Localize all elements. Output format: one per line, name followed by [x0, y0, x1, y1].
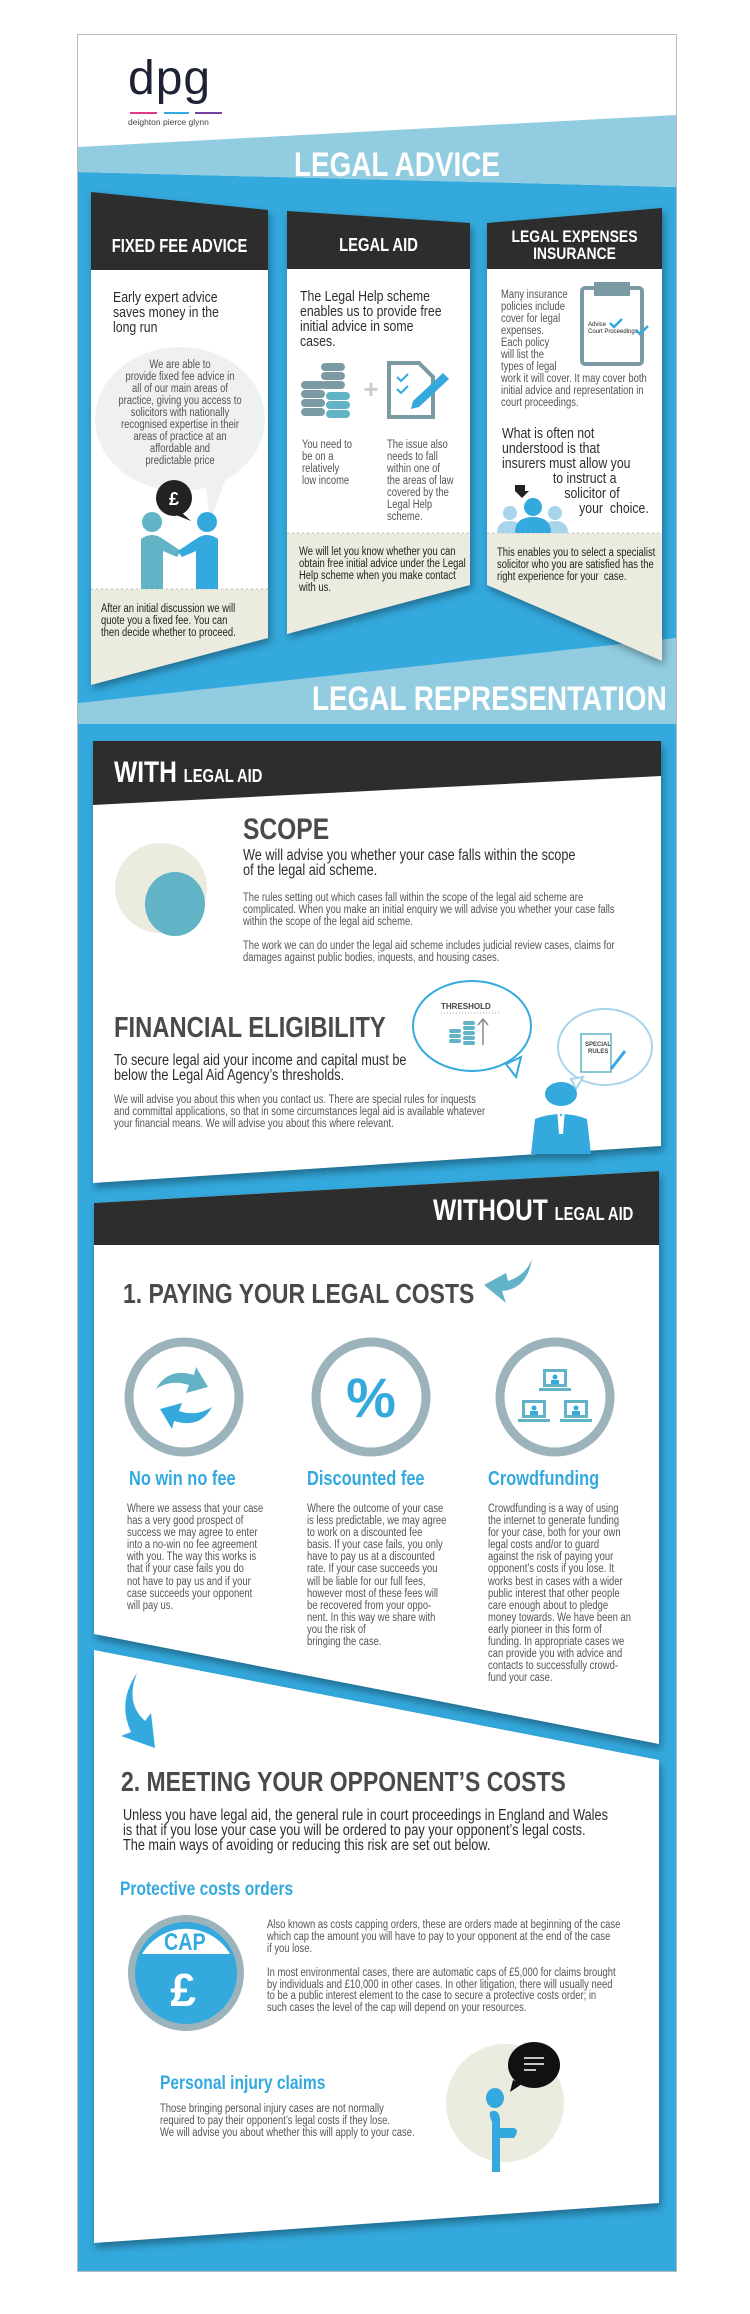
icon: overlapping circles — [115, 843, 207, 936]
choice text: to instruct a — [553, 470, 616, 487]
icon: threshold bubble and person: THRESHOLD — [441, 1002, 491, 1011]
footer text: right experience for your case. — [497, 571, 626, 583]
text: area of law: needs to fall — [387, 451, 438, 463]
discounted fee text: to work on a discounted fee — [307, 1527, 422, 1539]
arrow down — [121, 1673, 155, 1748]
discounted fee text: be recovered from your oppo- — [307, 1600, 431, 1612]
scope body — [243, 892, 615, 964]
intro text: initial advice in some — [300, 318, 413, 335]
financial lead — [114, 1052, 406, 1084]
crowdfunding text: Crowdfunding is a way of using — [488, 1503, 619, 1515]
choice text: understood is that — [502, 440, 600, 457]
intro text — [113, 289, 219, 336]
discounted fee text: Where the outcome of your case — [307, 1503, 443, 1515]
footer text: with us. — [299, 582, 331, 594]
speech bubble: areas of practice at an — [133, 431, 227, 443]
logo: dpg: deighton pierce glynn — [128, 117, 209, 127]
arrow — [484, 1259, 532, 1303]
speech bubble: provide fixed fee advice in — [125, 371, 235, 383]
choice text: solicitor of — [564, 485, 620, 502]
footer text: quote you a fixed fee. You can — [101, 615, 227, 627]
scope lead: of the legal aid scheme. — [243, 862, 377, 879]
crowdfunding text: care enough about to pledge — [488, 1600, 608, 1612]
intro text: The main ways of avoiding or reducing this risk are set out below. — [123, 1837, 490, 1854]
insurance text: Many insurance — [501, 289, 568, 301]
crowdfunding text: legal costs and/or to guard — [488, 1539, 599, 1551]
speech bubble: predictable price — [145, 455, 215, 467]
icon: clipboard — [580, 282, 649, 366]
heading: meeting your opponent's costs: 2. MEETING YOUR OPPONENT’S COSTS — [121, 1766, 566, 1797]
insurance text: policies include — [501, 301, 565, 313]
icon: crowdfunding computers — [496, 1338, 614, 1456]
financial body: We will advise you about this when you contact us. There are special rules for inquests — [114, 1094, 476, 1106]
insurance text: work it will cover. It may cover both — [501, 373, 647, 385]
financial body: your financial means. We will advise you about this where relevant. — [114, 1118, 394, 1130]
intro text: Early expert advice — [113, 289, 218, 306]
intro text — [300, 288, 442, 350]
text: income requirement: relatively — [302, 463, 339, 475]
financial lead: below the Legal Aid Agency’s thresholds. — [114, 1067, 344, 1084]
panel: fixed fee advice — [88, 192, 275, 692]
discounted fee text: you the risk of — [307, 1624, 366, 1636]
choice text: your choice. — [579, 500, 649, 517]
scope body: The rules setting out which cases fall within the scope of the legal aid scheme are — [243, 892, 583, 904]
discounted fee title: Discounted fee — [307, 1468, 425, 1490]
crowdfunding text: public interest that other people — [488, 1588, 620, 1600]
text: area of law: within one of — [387, 463, 440, 475]
header text: LEGAL EXPENSES — [511, 227, 638, 246]
insurance text: initial advice and representation in — [501, 385, 644, 397]
protective costs orders title: Protective costs orders — [120, 1879, 293, 1900]
panel: without legal aid part 2 — [91, 1650, 666, 2252]
speech bubble: We are able to — [149, 359, 211, 371]
discounted fee text: basis. If your case fails, you only — [307, 1539, 443, 1551]
no win no fee text: that if your case fails you do — [127, 1563, 244, 1575]
protective costs text: In most environmental cases, there are automatic caps of £5,000 for claims brought — [267, 1967, 616, 1979]
text: area of law — [387, 439, 454, 523]
no win no fee text: success we may agree to enter — [127, 1527, 258, 1539]
no win no fee text: Where we assess that your case — [127, 1503, 263, 1515]
heading: legal advice: LEGAL ADVICE — [294, 146, 500, 184]
speech bubble: recognised expertise in their — [121, 419, 239, 431]
no win no fee text: into a no-win no fee agreement — [127, 1539, 257, 1551]
scope body: within the scope of the legal aid scheme. — [243, 916, 413, 928]
footer text: then decide whether to proceed. — [101, 627, 236, 639]
footer text: solicitor who you are satisfied has the — [497, 559, 654, 571]
personal injury text: Those bringing personal injury cases are not normally — [160, 2103, 384, 2115]
scope heading: SCOPE — [243, 813, 329, 846]
icon: no win no fee — [124, 1338, 244, 1456]
logo: dpg: dpg — [128, 52, 211, 105]
footer text: This enables you to select a specialist — [497, 547, 655, 559]
insurance text: cover for legal — [501, 313, 560, 325]
protective costs text: which cap the amount you will have to pay to your opponent at the end of the case — [267, 1931, 610, 1943]
background frame — [77, 34, 677, 2272]
crowdfunding text: opponent’s costs if you lose. It — [488, 1563, 614, 1575]
icon: clipboard: Court Proceedings — [588, 329, 638, 335]
intro text: long run — [113, 319, 157, 336]
header text: LEGAL AID — [339, 235, 418, 255]
insurance text: types of legal — [501, 361, 557, 373]
icon: cap: £ — [170, 1964, 196, 2016]
panel: without legal aid part 1 — [91, 1171, 666, 1752]
panel: with legal aid — [90, 741, 668, 1192]
text: income requirement: low income — [302, 475, 349, 487]
icon: people with selection — [497, 485, 568, 533]
crowdfunding title: Crowdfunding — [488, 1468, 599, 1490]
financial body: and committal applications, so that in some circumstances legal aid is available whatever — [114, 1106, 485, 1118]
no win no fee title: No win no fee — [129, 1468, 236, 1490]
icon: person talking — [446, 2042, 566, 2172]
personal injury text — [160, 2103, 415, 2139]
scope body: The work we can do under the legal aid scheme includes judicial review cases, claims for — [243, 940, 615, 952]
financial eligibility heading: FINANCIAL ELIGIBILITY — [114, 1012, 386, 1044]
icon: threshold bubble and person: RULES — [588, 1049, 608, 1055]
scope lead: We will advise you whether your case falls within the scope — [243, 847, 576, 864]
crowdfunding text: against the risk of paying your — [488, 1551, 613, 1563]
discounted fee text — [307, 1503, 446, 1648]
personal injury text: required to pay their opponent’s legal costs if they lose. — [160, 2115, 390, 2127]
header text: INSURANCE — [533, 244, 616, 263]
protective costs text — [267, 1920, 620, 2015]
discounted fee text: have to pay us at a discounted — [307, 1551, 435, 1563]
text: area of law: The issue also — [387, 439, 448, 451]
text: area of law: scheme. — [387, 511, 423, 523]
choice text: insurers must allow you — [502, 455, 631, 472]
no win no fee text — [127, 1503, 263, 1612]
intro text: is that if you lose your case you will be ordered to pay your opponent’s legal costs. — [123, 1822, 586, 1839]
footer text — [497, 547, 656, 583]
speech bubble: practice, giving you access to — [118, 395, 242, 407]
insurance text: expenses. — [501, 325, 544, 337]
financial body — [114, 1094, 485, 1130]
crowdfunding text: fund your case. — [488, 1672, 552, 1684]
footer text — [101, 603, 236, 639]
no win no fee text: case succeeds your opponent — [127, 1588, 252, 1600]
no win no fee text: will pay us. — [127, 1600, 173, 1612]
insurance text: will list the — [501, 349, 544, 361]
icon: handshake people: £ — [169, 489, 179, 509]
header text: FIXED FEE ADVICE — [112, 236, 247, 256]
discounted fee text: however most of these fees will — [307, 1588, 438, 1600]
crowdfunding text — [488, 1503, 631, 1684]
icon: cap — [128, 1915, 244, 2031]
text: income requirement: be on a — [302, 451, 333, 463]
intro text — [123, 1807, 608, 1854]
no win no fee text: not have to pay us and if your — [127, 1576, 251, 1588]
logo: dpg — [128, 52, 222, 127]
text: area of law: covered by the — [387, 487, 449, 499]
insurance text: Each policy — [501, 337, 549, 349]
financial lead: To secure legal aid your income and capital must be — [114, 1052, 406, 1069]
insurance text: court proceedings. — [501, 397, 579, 409]
discounted fee text: is less predictable, we may agree — [307, 1515, 446, 1527]
speech bubble: all of our main areas of — [132, 383, 228, 395]
discounted fee text: rate. If your case succeeds you — [307, 1563, 438, 1575]
footer text — [299, 546, 466, 594]
header text — [511, 227, 638, 263]
heading: legal representation: LEGAL REPRESENTATION — [312, 680, 667, 718]
crowdfunding text: early pioneer in this form of — [488, 1624, 602, 1636]
footer text: We will let you know whether you can — [299, 546, 456, 558]
icon: threshold bubble and person: SPECIAL — [585, 1042, 611, 1048]
intro text: cases. — [300, 333, 336, 350]
personal injury title: Personal injury claims — [160, 2073, 325, 2094]
crowdfunding text: money towards. We have been an — [488, 1612, 631, 1624]
discounted fee text: bringing the case. — [307, 1636, 381, 1648]
intro text: Unless you have legal aid, the general rule in court proceedings in England and Wales — [123, 1807, 608, 1824]
protective costs text: if you lose. — [267, 1943, 312, 1955]
scope body: complicated. When you make an initial enquiry we will advise you whether your case falls — [243, 904, 615, 916]
discounted fee text: nent. In this way we share with — [307, 1612, 435, 1624]
intro text: enables us to provide free — [300, 303, 442, 320]
choice text — [502, 425, 649, 517]
crowdfunding text: contacts to successfully crowd- — [488, 1660, 618, 1672]
icon: clipboard: Advice — [588, 322, 607, 328]
choice text: What is often not — [502, 425, 594, 442]
protective costs text: such cases the level of the cap will depend on your resources. — [267, 2002, 526, 2014]
intro text: The Legal Help scheme — [300, 288, 430, 305]
speech bubble: affordable and — [150, 443, 210, 455]
heading: paying your legal costs: 1. PAYING YOUR LEGAL COSTS — [123, 1278, 474, 1309]
protective costs text: by individuals and £10,000 in other cases. In other litigation, there will usually need — [267, 1979, 612, 1991]
icon: threshold bubble and person — [412, 980, 653, 1164]
text: area of law: Legal Help — [387, 499, 432, 511]
text: income requirement — [302, 439, 352, 487]
icon: cap: CAP — [164, 1928, 206, 1955]
crowdfunding text: the internet to generate funding — [488, 1515, 619, 1527]
no win no fee text: with you. The way this works is — [127, 1551, 256, 1563]
icon: handshake people — [141, 480, 218, 589]
panel: legal expenses insurance — [484, 208, 669, 668]
protective costs text: Also known as costs capping orders, these are orders made at beginning of the case — [267, 1919, 620, 1931]
speech bubble — [95, 347, 265, 514]
text: income requirement: You need to — [302, 439, 352, 451]
personal injury text: We will advise you about whether this will apply to your case. — [160, 2127, 415, 2139]
insurance text — [501, 289, 647, 409]
scope lead — [243, 847, 576, 879]
scope body: damages against public bodies, inquests, and housing cases. — [243, 952, 499, 964]
header text: WITH LEGAL AID — [114, 756, 262, 789]
icon: coins plus document — [301, 361, 449, 419]
crowdfunding text: works best in cases with a wider — [488, 1576, 623, 1588]
footer text: After an initial discussion we will — [101, 603, 235, 615]
footer text: obtain free initial advice under the Legal — [299, 558, 466, 570]
crowdfunding text: funding. In appropriate cases we — [488, 1636, 624, 1648]
speech bubble: solicitors with nationally — [131, 407, 229, 419]
icon: percent: % — [346, 1366, 396, 1429]
panel: legal aid — [284, 211, 477, 641]
crowdfunding text: for your case, both for your own — [488, 1527, 621, 1539]
text: area of law: the areas of law — [387, 475, 454, 487]
header text: WITHOUT LEGAL AID — [433, 1194, 633, 1227]
protective costs text: to be a public interest element to the case to secure a protective costs order; in — [267, 1990, 596, 2002]
icon: coins plus document: + — [363, 374, 379, 404]
crowdfunding text: can provide you with advice and — [488, 1648, 622, 1660]
discounted fee text: will be liable for our full fees, — [307, 1576, 425, 1588]
no win no fee text: has a very good prospect of — [127, 1515, 243, 1527]
footer text: Help scheme when you make contact — [299, 570, 456, 582]
icon: percent — [312, 1338, 430, 1456]
intro text: saves money in the — [113, 304, 219, 321]
